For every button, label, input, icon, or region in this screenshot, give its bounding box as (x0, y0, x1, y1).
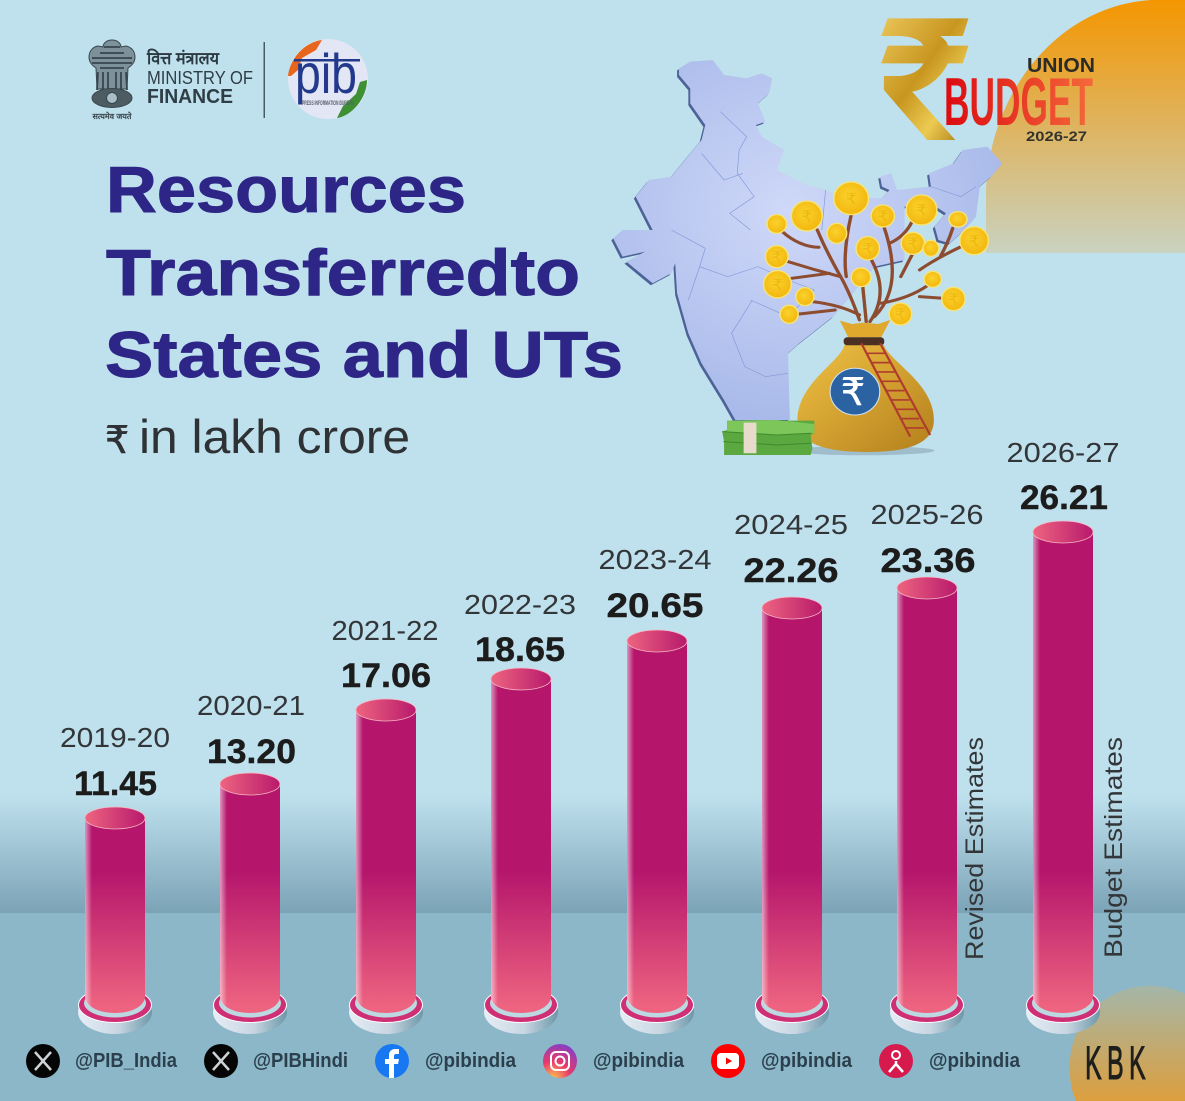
icon: YouTube (711, 1044, 745, 1078)
bar chart (60, 437, 1120, 1034)
map shadow (611, 62, 1000, 422)
title: States and UTs (105, 318, 623, 391)
subtitle: ₹ (105, 418, 129, 462)
coin rupee marks: ₹ (916, 203, 927, 219)
bar: 2019-20 (60, 722, 170, 1034)
bar: 2024-25: 2024-25 (734, 509, 848, 540)
bar: 2021-22: 17.06 (341, 657, 431, 695)
icon: Koo (879, 1044, 913, 1078)
bar: 2025-26 (870, 499, 984, 1034)
bar: 2021-22: 2021-22 (332, 615, 438, 646)
panel: corner circle (1070, 986, 1185, 1101)
icon: medallion rupee: ₹ (841, 370, 865, 414)
logo: Union Budget 2026-27: 2026-27 (1026, 128, 1087, 144)
icon: X (204, 1044, 238, 1078)
panel: orange corner shape (986, 0, 1185, 253)
logo: PIB: pib (295, 42, 357, 105)
annotation: Budget Estimates: Budget Estimates (1100, 737, 1128, 958)
icon: Instagram (543, 1044, 577, 1078)
coin rupee marks: ₹ (948, 292, 959, 308)
bar: 2021-22 (332, 615, 438, 1034)
handle: pibindia Facebook: @pibindia (425, 1050, 517, 1072)
coin rupee marks: ₹ (772, 277, 783, 294)
social media row (26, 1044, 1021, 1078)
cash stack (722, 420, 814, 455)
coin tree branches (782, 215, 974, 322)
coin rupee marks: ₹ (895, 307, 906, 323)
icon: national emblem (89, 40, 135, 108)
bar: 2024-25 (734, 509, 848, 1034)
coin rupee marks: ₹ (907, 236, 918, 253)
bar: 2019-20: 11.45 (74, 765, 157, 803)
coin rupee marks: ₹ (969, 233, 980, 250)
bar: 2024-25: 22.26 (744, 552, 838, 590)
money bag (792, 320, 935, 455)
bar: 2023-24: 20.65 (606, 587, 704, 625)
bar: 2025-26: 2025-26 (870, 499, 984, 530)
logo: Ministry of Finance: FINANCE (147, 86, 233, 108)
handle: PIB_India: @PIB_India (75, 1050, 178, 1072)
coin rupee marks: ₹ (877, 209, 888, 225)
illustration: India map with coin tree and money bag (611, 18, 1002, 455)
icon: Facebook (375, 1044, 409, 1078)
bar: 2026-27 (1006, 437, 1120, 1034)
subtitle: in lakh crore (139, 410, 410, 463)
ladder (861, 343, 930, 437)
handle: PIBHindi: @PIBHindi (253, 1050, 348, 1072)
logo: Ministry of Finance: MINISTRY OF (147, 67, 253, 88)
bag medallion (830, 368, 880, 415)
bar: 2022-23: 2022-23 (464, 589, 576, 620)
bar: 2023-24 (598, 544, 712, 1034)
map of India (613, 60, 1002, 420)
title (105, 153, 623, 391)
bar: 2019-20: 2019-20 (60, 722, 170, 753)
coin rupee marks (771, 191, 980, 323)
bar: 2022-23: 18.65 (475, 631, 565, 669)
bar: 2025-26: 23.36 (880, 542, 976, 580)
title: Transferredto (106, 236, 580, 309)
coin rupee marks: ₹ (862, 241, 873, 258)
ministry name: वित्त मंत्रालय (146, 48, 220, 68)
coin rupee marks: ₹ (801, 209, 812, 225)
bar: 2023-24: 2023-24 (598, 544, 712, 575)
handle: pibindia YouTube: @pibindia (761, 1050, 853, 1072)
bar: 2026-27: 26.21 (1020, 479, 1108, 517)
handle: pibindia Instagram: @pibindia (593, 1050, 685, 1072)
bar: 2022-23 (464, 589, 576, 1034)
logo: Union Budget 2026-27 (944, 55, 1095, 144)
logo: Union Budget 2026-27: UNION (1027, 55, 1095, 77)
annotation: Revised Estimates: Revised Estimates (961, 737, 989, 960)
bar: 2026-27: 2026-27 (1006, 437, 1120, 468)
icon: X (26, 1044, 60, 1078)
divider (264, 42, 265, 118)
emblem motto: सत्यमेव जयते (92, 111, 132, 121)
title: Resources (106, 153, 466, 226)
bar: 2020-21: 13.20 (207, 733, 296, 771)
bar: 2020-21: 2020-21 (197, 690, 305, 721)
gold rupee symbol (881, 18, 968, 140)
coins (764, 182, 988, 325)
coin rupee marks: ₹ (771, 249, 782, 266)
bar: 2020-21 (197, 690, 305, 1034)
logo: PIB: PRESS INFORMATION BUREAU (302, 101, 354, 107)
coin rupee marks: ₹ (846, 191, 857, 208)
handle: pibindia Koo: @pibindia (929, 1050, 1021, 1072)
logo: Ministry of Finance (89, 40, 253, 121)
